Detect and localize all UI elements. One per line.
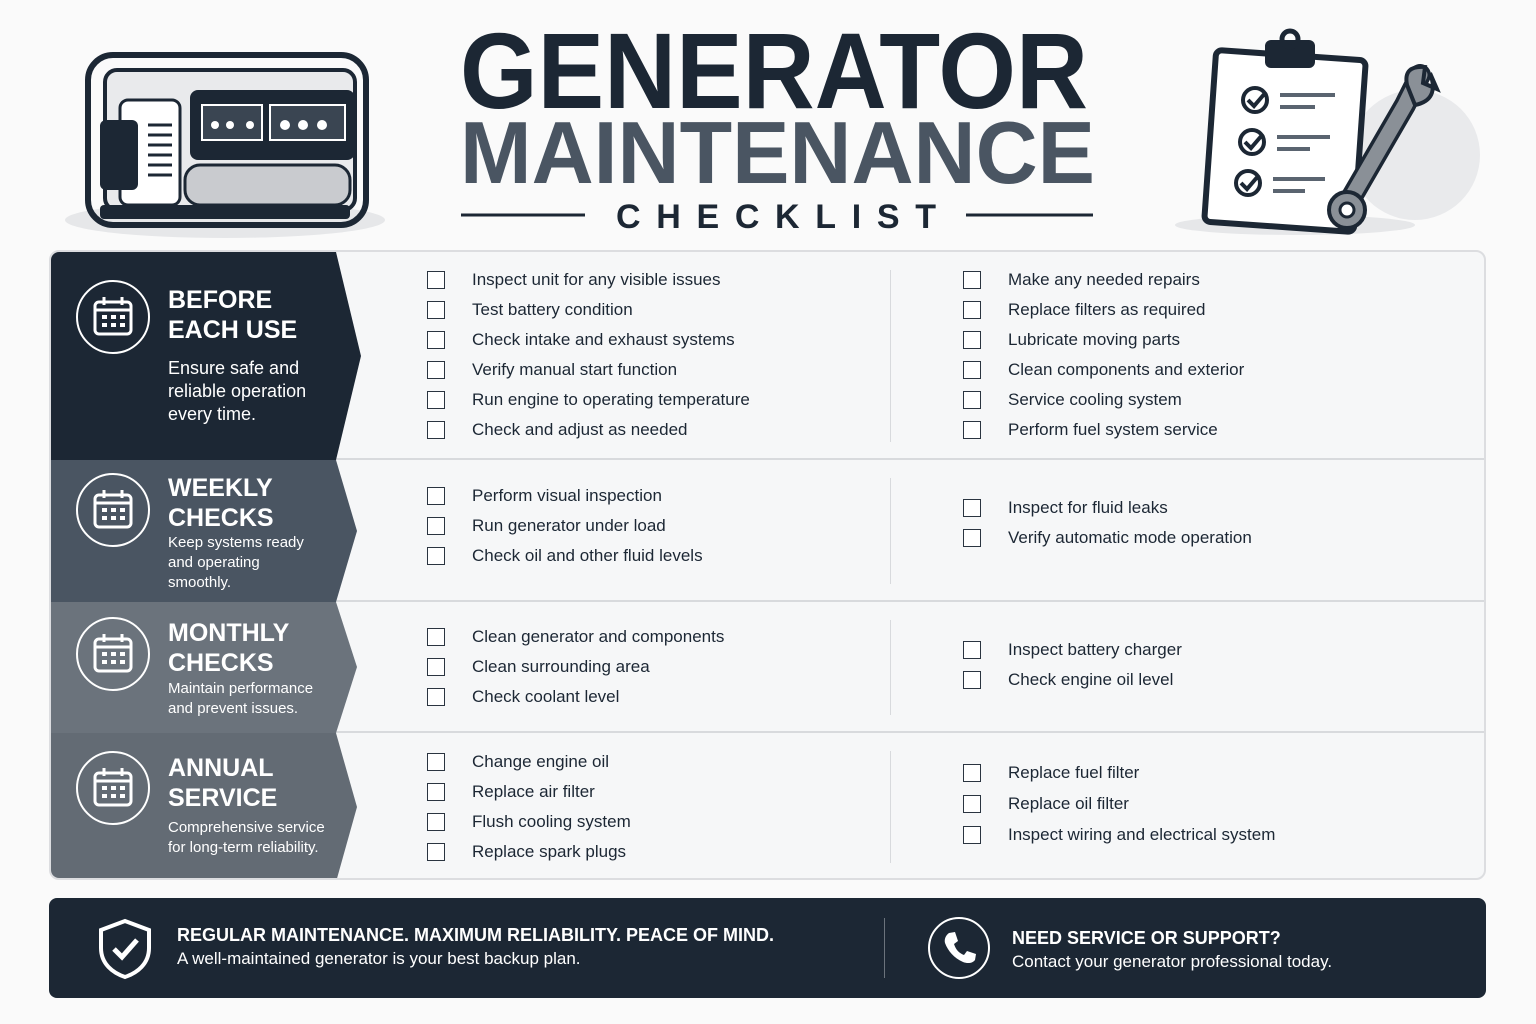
label: monthly checks: [51, 602, 357, 733]
list: before each use left: [427, 270, 750, 439]
icon: clipboard and wrench: [1175, 28, 1480, 235]
description: reliable operation: [168, 381, 306, 401]
heading: [168, 286, 297, 344]
list: annual right: Replace fuel filter: [1008, 763, 1139, 782]
list: monthly left: Check coolant level: [472, 687, 619, 706]
list: before each use right: Replace filters as required: [1008, 300, 1205, 319]
title: [460, 25, 1095, 235]
list: before each use left: Verify manual start function: [472, 360, 677, 379]
list: monthly right: Inspect battery charger: [1008, 640, 1182, 659]
list: weekly right: Inspect for fluid leaks: [1008, 498, 1168, 517]
list: annual right: Inspect wiring and electrical system: [1008, 825, 1275, 844]
list: annual right: Replace oil filter: [1008, 794, 1129, 813]
list: before each use left: Run engine to operating temperature: [472, 390, 750, 409]
title: MAINTENANCE: [460, 103, 1095, 202]
description: [168, 534, 304, 591]
list: monthly left: [427, 627, 724, 706]
list: before each use right: Clean components and exterior: [1008, 360, 1244, 379]
list: annual left: Flush cooling system: [472, 812, 631, 831]
description: [168, 819, 325, 856]
description: Keep systems ready: [168, 534, 304, 551]
list: before each use left: Check intake and exhaust systems: [472, 330, 735, 349]
icon: phone: [928, 917, 990, 979]
footer banner: [49, 898, 1486, 998]
list: annual left: [427, 752, 631, 861]
label: weekly checks: [51, 460, 357, 602]
list: weekly left: Run generator under load: [472, 516, 666, 535]
icon: calendar: [76, 473, 150, 547]
list: before each use right: [963, 270, 1244, 439]
list: weekly right: Verify automatic mode operation: [1008, 528, 1252, 547]
list: monthly right: Check engine oil level: [1008, 670, 1173, 689]
list: before each use left: Test battery condition: [472, 300, 633, 319]
row: weekly: [51, 460, 1488, 602]
list: weekly left: [427, 486, 703, 565]
heading: BEFORE: [168, 286, 272, 314]
heading: [168, 619, 289, 677]
description: Maintain performance: [168, 680, 313, 697]
description: [168, 680, 313, 717]
heading: CHECKS: [168, 649, 274, 677]
list: annual left: Replace spark plugs: [472, 842, 626, 861]
row: before each use: [51, 252, 1488, 460]
list: before each use right: Perform fuel system service: [1008, 420, 1218, 439]
list: monthly left: Clean generator and components: [472, 627, 724, 646]
heading: EACH USE: [168, 316, 297, 344]
title: CHECKLIST: [616, 198, 936, 235]
list: annual right: [963, 763, 1275, 844]
description: and operating: [168, 554, 260, 571]
heading: WEEKLY: [168, 474, 273, 502]
description: for long-term reliability.: [168, 839, 319, 856]
list: annual left: Replace air filter: [472, 782, 595, 801]
icon: calendar: [76, 751, 150, 825]
panel: checklist card: [49, 250, 1486, 880]
list: before each use right: Service cooling system: [1008, 390, 1182, 409]
heading: SERVICE: [168, 784, 277, 812]
list: weekly right: [963, 498, 1252, 547]
icon: shield: [99, 918, 151, 980]
icon: calendar: [76, 617, 150, 691]
list: monthly left: Clean surrounding area: [472, 657, 650, 676]
list: weekly left: Check oil and other fluid levels: [472, 546, 703, 565]
description: Ensure safe and: [168, 358, 299, 378]
description: Comprehensive service: [168, 819, 325, 836]
description: every time.: [168, 404, 256, 424]
description: and prevent issues.: [168, 700, 298, 717]
footer text right: NEED SERVICE OR SUPPORT?: [1012, 928, 1281, 948]
row: monthly: [51, 602, 1488, 733]
label: annual service: [51, 733, 357, 878]
heading: CHECKS: [168, 504, 274, 532]
description: smoothly.: [168, 574, 231, 591]
list: before each use left: Check and adjust as needed: [472, 420, 688, 439]
list: annual left: Change engine oil: [472, 752, 609, 771]
row: annual: [51, 733, 1275, 878]
footer text left: [177, 925, 774, 968]
list: monthly right: [963, 640, 1182, 689]
list: weekly left: Perform visual inspection: [472, 486, 662, 505]
heading: [168, 474, 274, 532]
list: before each use right: Make any needed repairs: [1008, 270, 1200, 289]
label: before each use: [51, 252, 361, 460]
footer text left: A well-maintained generator is your best backup plan.: [177, 949, 581, 968]
heading: MONTHLY: [168, 619, 289, 647]
heading: ANNUAL: [168, 754, 274, 782]
footer text right: Contact your generator professional today.: [1012, 952, 1332, 971]
footer text left: REGULAR MAINTENANCE. MAXIMUM RELIABILITY. PEACE OF MIND.: [177, 925, 774, 945]
list: before each use left: Inspect unit for any visible issues: [472, 270, 721, 289]
description: [168, 358, 306, 424]
heading: [168, 754, 277, 812]
footer text right: [1012, 928, 1332, 971]
list: before each use right: Lubricate moving parts: [1008, 330, 1180, 349]
icon: calendar: [76, 280, 150, 354]
icon: generator illustration: [65, 52, 385, 238]
